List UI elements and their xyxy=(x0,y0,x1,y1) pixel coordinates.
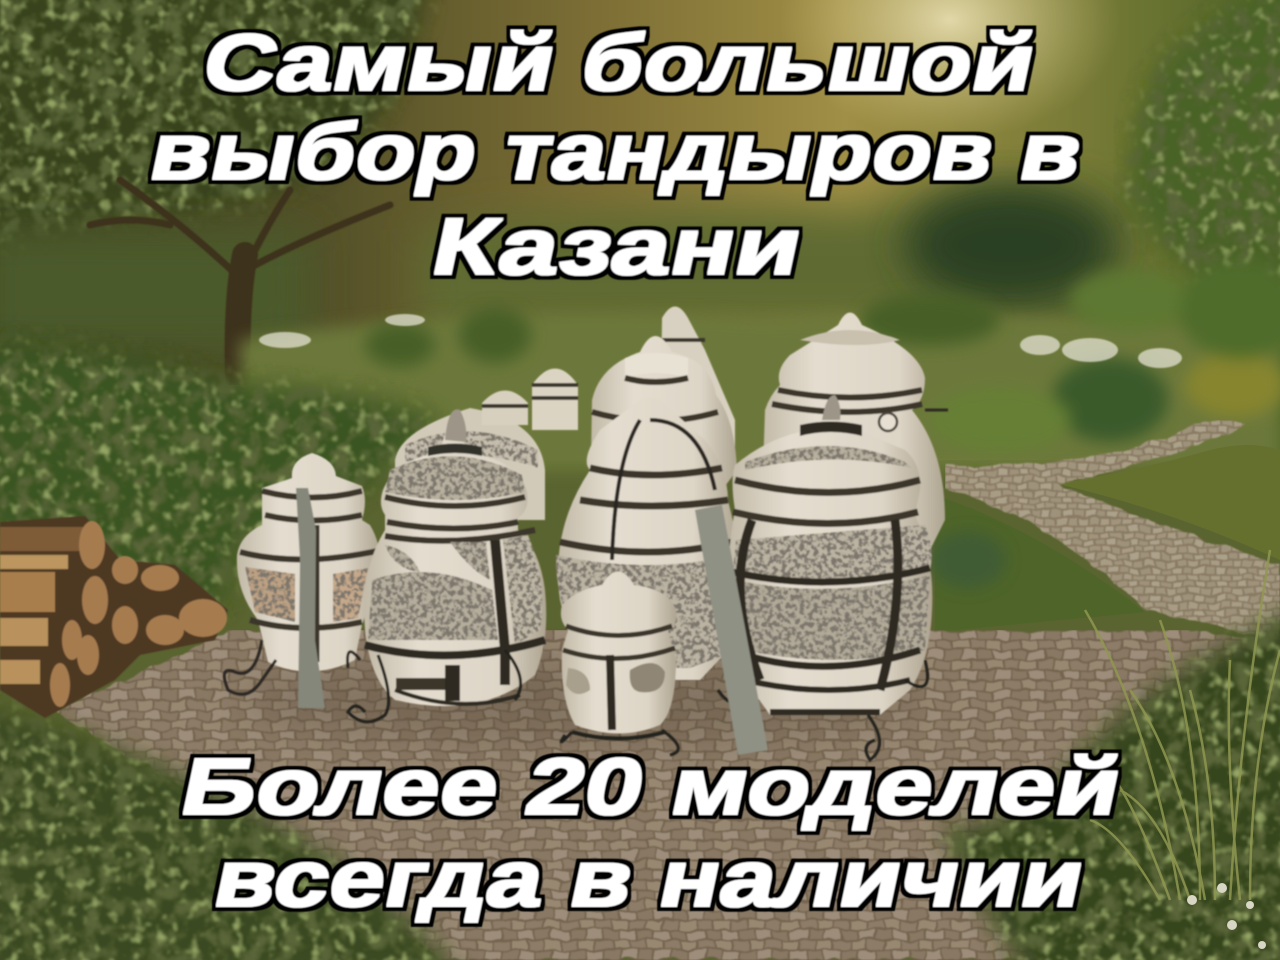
right lawn upper xyxy=(1058,445,1280,560)
poker tool right xyxy=(695,505,768,755)
winding path xyxy=(945,420,1280,640)
tandoor: back centre tall xyxy=(590,336,737,520)
sky and distant trees xyxy=(0,0,1280,460)
stack mass xyxy=(0,516,228,718)
title heading xyxy=(142,19,1091,292)
middle lawn xyxy=(935,495,1145,632)
right tree canopy xyxy=(1130,0,1280,310)
tandoor: back small centre xyxy=(395,390,545,520)
caption line 1: Более 20 моделей xyxy=(173,743,1130,832)
tandoors group xyxy=(224,306,948,760)
firewood stack xyxy=(0,516,228,718)
grass blades xyxy=(1085,550,1280,900)
foreground right grass xyxy=(940,610,1280,960)
left mid green xyxy=(0,230,310,350)
tandoor: left xyxy=(224,453,382,708)
far treeline xyxy=(420,187,1130,330)
tandoor: back small xyxy=(532,368,578,430)
left hedge xyxy=(0,345,440,610)
tandoor: front right large xyxy=(718,395,932,760)
title line 2: выбор тандыров в xyxy=(142,108,1091,197)
meadow shrubs xyxy=(365,260,1280,452)
left tree canopy xyxy=(0,0,430,270)
dark trees right of centre xyxy=(905,185,1115,305)
bottom caption xyxy=(173,743,1130,924)
sun glow through trees xyxy=(780,0,1120,140)
shrub on lawn xyxy=(930,532,1006,588)
tandoor: centre mid xyxy=(556,398,738,680)
logs xyxy=(0,521,227,707)
tandoor: back tall rear xyxy=(660,306,735,470)
paved area xyxy=(55,630,1280,960)
tandoor: small front xyxy=(561,572,678,755)
tandoor: front left large xyxy=(348,409,546,722)
white flowers xyxy=(259,314,1182,368)
meadow xyxy=(240,313,1280,470)
caption line 2: всегда в наличии xyxy=(206,835,1093,924)
tandoor: back right large xyxy=(760,312,948,560)
white foreground flowers xyxy=(1187,883,1266,949)
title line 3: Казани xyxy=(424,203,811,292)
foreground left grass xyxy=(0,705,460,960)
title line 1: Самый большой xyxy=(195,19,1044,108)
tree trunk and branches xyxy=(90,180,390,375)
shadow under tandoors xyxy=(240,655,920,745)
